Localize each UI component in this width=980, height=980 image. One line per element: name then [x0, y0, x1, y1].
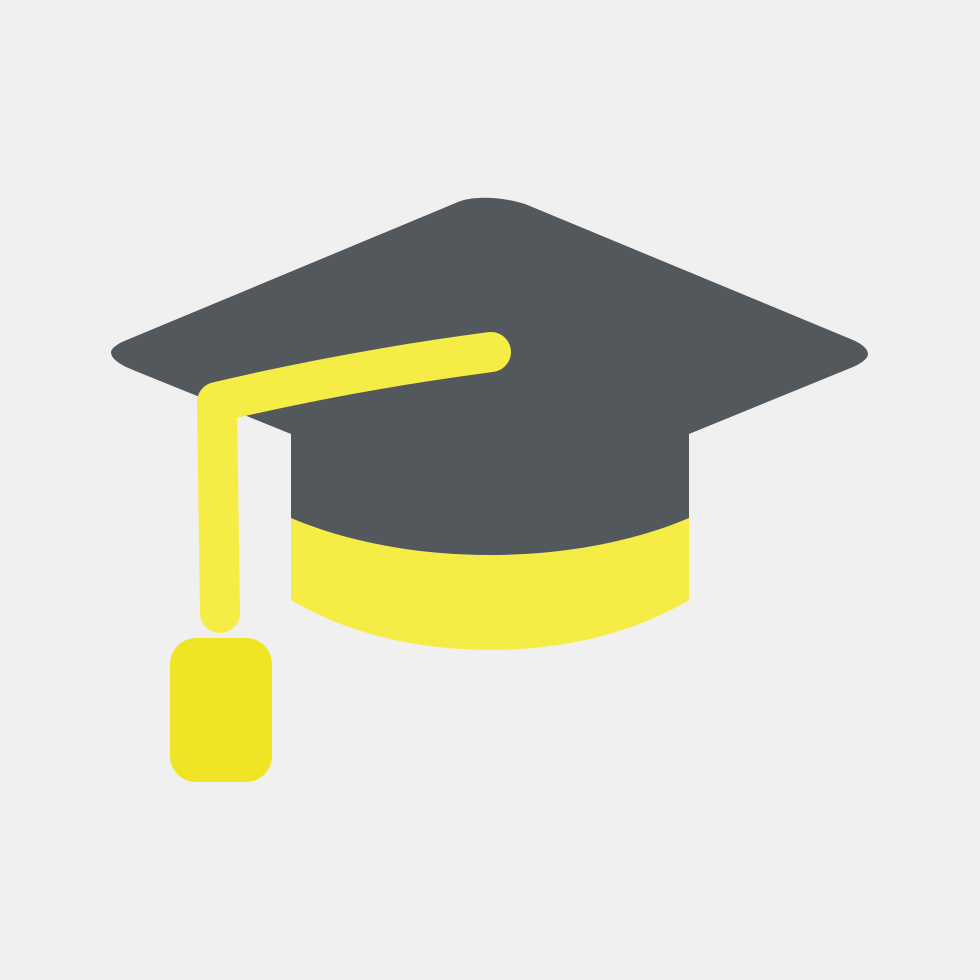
mortarboard — [111, 198, 868, 555]
cap base: yellow band — [291, 517, 689, 650]
tassel end — [170, 638, 272, 782]
tassel cord — [217, 352, 491, 613]
